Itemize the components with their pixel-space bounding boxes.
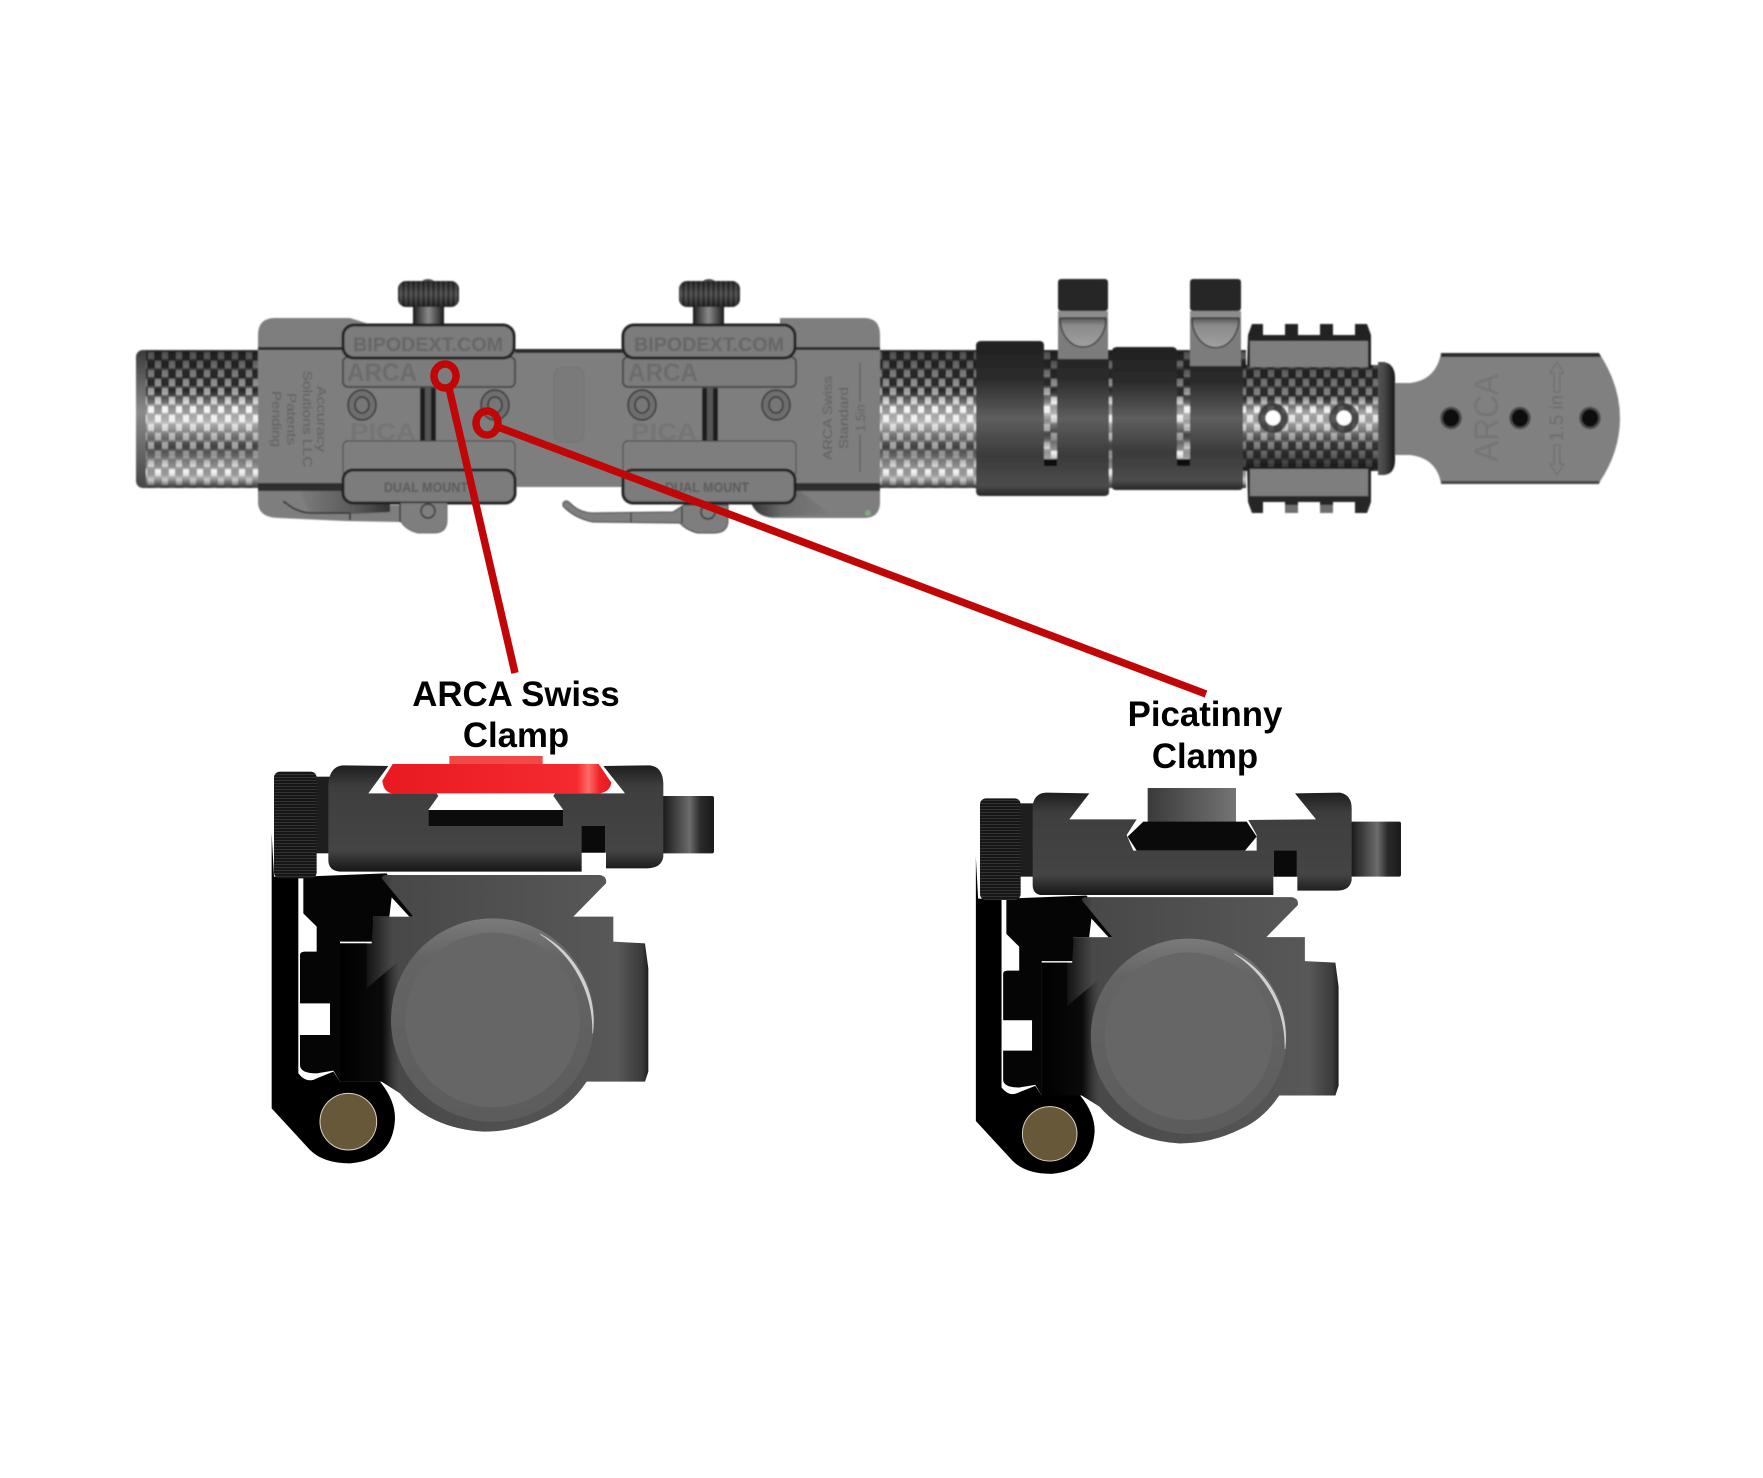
left clamp base with engraved text: Pending — [269, 391, 283, 447]
tube mounting holes — [1258, 403, 1359, 433]
clamp collar one — [976, 341, 1109, 496]
center slot — [702, 388, 718, 441]
mount top block — [343, 325, 515, 387]
pica label: PICA — [350, 419, 416, 446]
mount screws — [628, 390, 790, 420]
right clamp base with engraved text: 1.5in — [854, 404, 868, 432]
mount top block: ARCA — [347, 359, 417, 387]
label: ARCA Swiss Clamp: ARCA Swiss — [412, 675, 620, 714]
left body shadow — [340, 943, 400, 1093]
adjustment knob — [398, 279, 459, 327]
picatinny section carbon tube — [1243, 365, 1380, 471]
side knob — [980, 798, 1021, 900]
carbon fiber tube: middle — [870, 350, 980, 488]
red arca rail — [382, 756, 611, 793]
mount bottom block — [343, 441, 515, 503]
left dual mount — [284, 279, 515, 533]
center connecting bar — [505, 349, 630, 487]
collar one carbon gap — [1044, 359, 1057, 466]
lower clamp assembly — [976, 857, 1339, 1174]
callout: Picatinny pointer — [476, 411, 1206, 694]
pivot button — [1091, 939, 1287, 1134]
lower clamp body — [1042, 897, 1339, 1143]
right clamp base with engraved text: ARCA Swiss — [821, 376, 835, 460]
left clamp base with engraved text: Accuracy — [314, 386, 328, 453]
ARCA Swiss clamp side view — [272, 756, 714, 1163]
knob connector — [1018, 803, 1038, 877]
mount top block: BIPODEXT.COM — [353, 335, 503, 356]
under-mount shadow — [300, 491, 390, 514]
infographic canvas — [135, 278, 1621, 1174]
dovetail insert — [1128, 822, 1257, 851]
adjustment knob — [679, 279, 740, 327]
white wedge gap — [1089, 919, 1108, 937]
clamp upper jaw — [328, 765, 663, 872]
lower jaw backing — [1003, 895, 1112, 1095]
under-mount shadow — [750, 491, 830, 517]
left clamp base with engraved text: Patents — [284, 393, 298, 445]
pivot button — [391, 918, 594, 1122]
picatinny rail top — [1247, 324, 1371, 367]
bipod extension rail assembly — [136, 279, 1620, 533]
label: Picatinny Clamp — [1128, 695, 1283, 776]
clamp collar two — [1112, 347, 1243, 490]
hook tab two — [1190, 279, 1241, 369]
callout: ARCA Swiss pointer — [434, 364, 515, 673]
brass pin — [1022, 1107, 1077, 1161]
tube behind collars — [1043, 348, 1248, 490]
arca end plate: 1.5 in — [1547, 395, 1568, 441]
knob connector — [313, 777, 333, 853]
quick release lever — [563, 501, 728, 533]
green paint dot — [865, 510, 871, 516]
clamp right tab — [660, 796, 714, 853]
label: ARCA Swiss Clamp — [412, 675, 620, 755]
left clamp base with engraved text — [258, 318, 400, 522]
mount screws — [348, 390, 509, 420]
jaw recess — [428, 810, 563, 826]
plate holes — [1442, 408, 1600, 428]
carbon fiber tube: left — [136, 350, 270, 488]
plate dimension arrows — [1550, 362, 1564, 475]
arca end plate — [1395, 353, 1620, 484]
lever arm — [976, 857, 1095, 1174]
clamp upper jaw — [1033, 793, 1352, 895]
lower clamp body — [340, 875, 648, 1132]
jaw notch — [1274, 851, 1297, 877]
picatinny rail bottom — [1247, 469, 1371, 513]
right clamp base with engraved text — [750, 318, 880, 518]
label: ARCA Swiss Clamp: Clamp — [463, 716, 569, 755]
left body shadow — [1042, 963, 1099, 1107]
lever arm — [272, 833, 395, 1163]
end cap — [1378, 362, 1395, 475]
pica label: PICA — [631, 419, 697, 446]
jaw notch — [582, 826, 605, 853]
lower jaw backing — [300, 873, 413, 1082]
right dual mount — [563, 279, 796, 533]
Picatinny clamp side view — [976, 788, 1401, 1174]
white wedge gap — [389, 897, 409, 917]
clamp right tab — [1348, 822, 1401, 877]
right clamp base with engraved text: Standard — [837, 387, 851, 449]
center post — [1148, 788, 1236, 823]
collar two carbon gap — [1177, 366, 1190, 466]
side knob — [274, 772, 317, 878]
quick release lever — [284, 502, 447, 533]
mount bottom block: DUAL MOUNT — [665, 479, 749, 495]
label: Picatinny Clamp: Clamp — [1152, 737, 1258, 776]
left clamp base with engraved text: Solutions LLC — [300, 370, 314, 468]
mount bottom block — [623, 441, 796, 503]
center slot — [420, 388, 436, 441]
hook tab one — [1058, 279, 1108, 363]
mount top block: ARCA — [628, 359, 698, 387]
mount top block: BIPODEXT.COM — [634, 335, 784, 356]
mount bottom block: DUAL MOUNT — [384, 479, 468, 495]
label: Picatinny Clamp: Picatinny — [1128, 695, 1283, 734]
mount top block — [623, 325, 796, 387]
plate engraved text: ARCA — [1468, 374, 1506, 462]
brass pin — [320, 1093, 377, 1150]
